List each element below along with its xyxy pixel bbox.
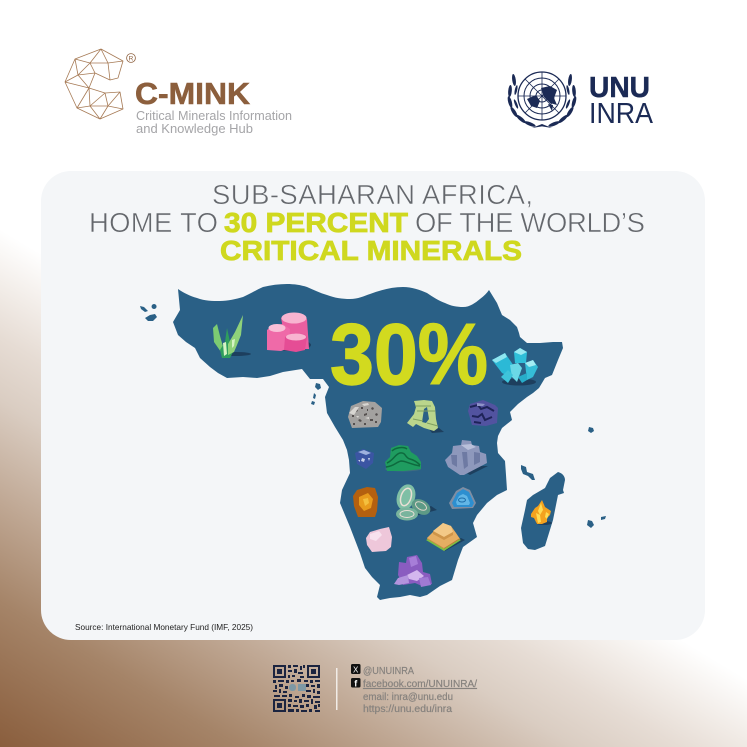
icon: blue agate (449, 487, 476, 509)
QR data modules (273, 665, 320, 712)
QR centre emblem (289, 684, 306, 691)
website: https://unu.edu/inra (363, 704, 453, 715)
source note: Source: International Monetary Fund (IMF, 2025) (75, 622, 253, 632)
Facebook link: facebook.com/UNUINRA/ (363, 679, 477, 690)
icon: UN emblem (507, 72, 577, 128)
icon: Facebook: f (354, 678, 358, 688)
icon: green banded ovals (393, 482, 437, 520)
icon: green banded stone (407, 400, 444, 433)
island: Madagascar (521, 472, 565, 550)
C-MINK subtitle: Critical Minerals Information (136, 108, 292, 123)
contact block (351, 664, 477, 715)
icon: granite (348, 401, 382, 428)
icon: cyan crystals (492, 348, 538, 386)
island: mauritius (587, 520, 594, 528)
icon: X: X (353, 665, 359, 674)
icon: malachite (385, 445, 421, 472)
QR code (273, 665, 320, 712)
islands: west atlantic (140, 304, 157, 321)
heading line 2 start: HOME TO (89, 207, 218, 238)
heading line 1: SUB-SAHARAN AFRICA, (212, 179, 533, 210)
icon: amber (353, 487, 378, 517)
icon: purple amethyst (394, 555, 432, 587)
island: seychelles (588, 427, 594, 433)
logo: C-MINK (65, 49, 292, 136)
icon: grey blocks (445, 440, 488, 475)
icon: pink mineral (267, 312, 311, 352)
X handle: @UNUINRA (363, 666, 414, 677)
INRA wordmark: INRA (589, 98, 654, 130)
icon: green crystals (213, 315, 251, 358)
heading (89, 179, 645, 266)
QR finder patterns (273, 665, 320, 712)
mainland outline (173, 284, 563, 600)
islands: comoros (521, 465, 535, 480)
icon: indigo ore (468, 400, 498, 426)
divider (336, 668, 338, 710)
icon: registered mark (127, 54, 135, 63)
heading highlight: critical minerals: CRITICAL MINERALS (220, 235, 522, 266)
island: reunion (601, 516, 606, 520)
map: Sub-Saharan Africa (140, 284, 606, 600)
UNU wordmark: UNU (589, 72, 650, 104)
icon: registered mark: R (129, 56, 134, 63)
email: email: inra@unu.edu (363, 692, 453, 703)
logo: UNU INRA (507, 72, 654, 130)
heading highlight: 30 percent: 30 PERCENT (224, 207, 408, 238)
big figure: 30%: 30% (330, 307, 488, 403)
icon: rose quartz (366, 527, 392, 552)
C-MINK subtitle: and Knowledge Hub (136, 121, 253, 136)
islands: gulf of guinea (311, 383, 321, 405)
heading line 2 end: OF THE WORLD’S (415, 207, 645, 238)
icon: C-MINK wireframe gem (65, 49, 123, 119)
icon: sand pyramid (426, 523, 465, 551)
icon: sodalite (355, 449, 374, 469)
panel: main card (41, 171, 705, 640)
icon: orange crystals (531, 500, 552, 525)
C-MINK wordmark: C-MINK (135, 76, 251, 111)
